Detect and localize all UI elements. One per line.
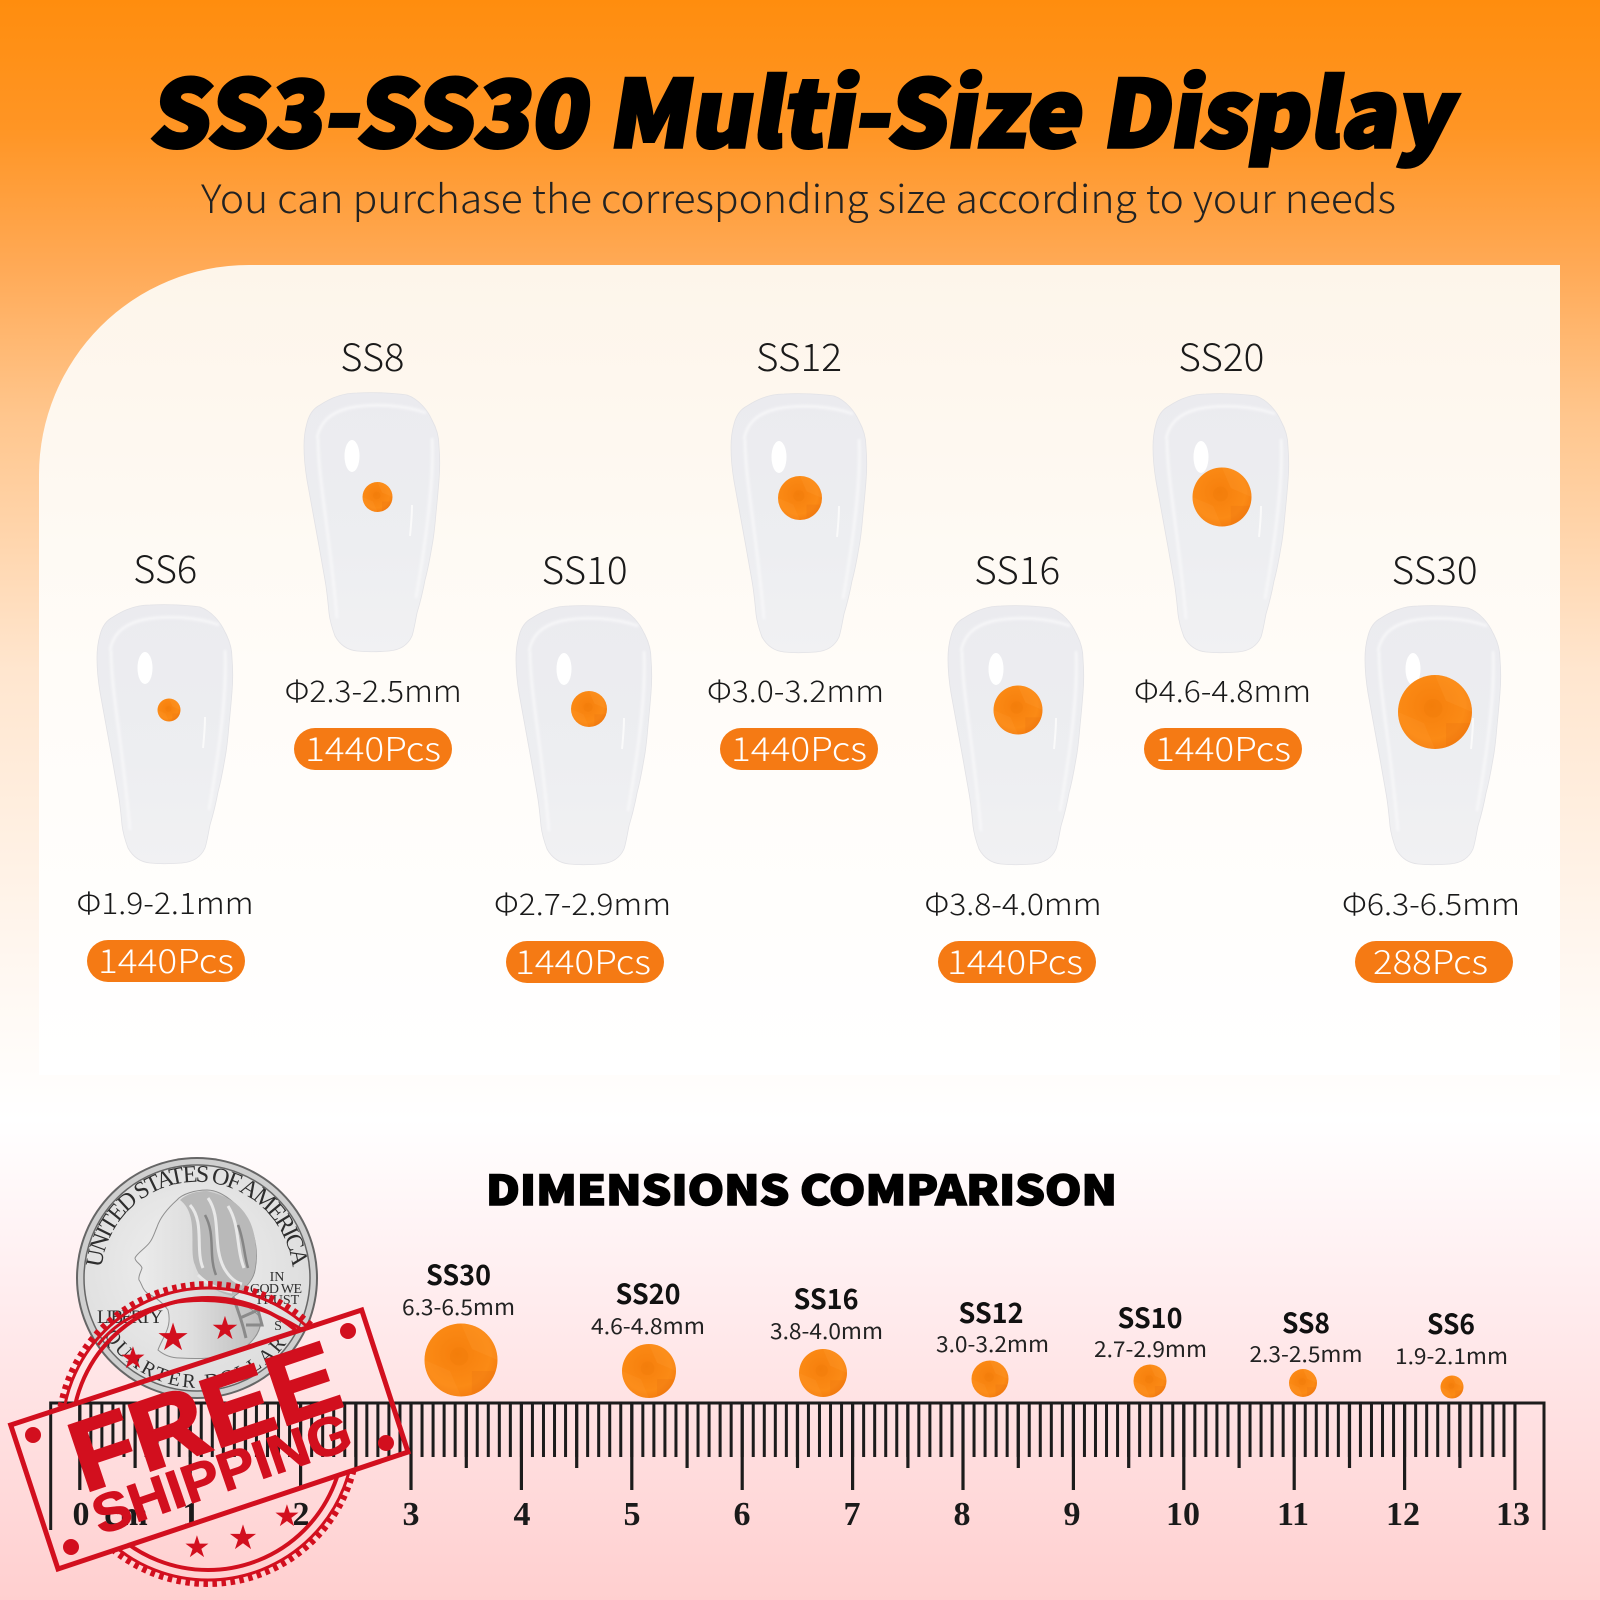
gem SS12 [778,476,822,520]
comparison SS20 [591,1273,705,1398]
coin legend: UNITED STATES OF AMERICA [86,1166,307,1268]
ruler numbers: 6 [734,1496,750,1533]
ruler numbers: 7 [844,1496,860,1533]
stamp text FREE: FREE [55,1320,354,1514]
diameter SS6: Φ1.9-2.1mm [76,879,254,923]
ruler numbers: 8 [954,1496,970,1533]
label SS12: SS12 [756,327,842,382]
nail SS20 [1153,394,1289,653]
title: SS3-SS30 Multi-Size Display [144,41,1469,174]
ruler numbers: 0 [72,1496,90,1533]
coin motto: GOD WE [250,1282,302,1297]
coin motto [250,1270,302,1334]
diameter SS8: Φ2.3-2.5mm [285,667,462,711]
subtitle: You can purchase the corresponding size according to your needs [201,169,1396,225]
free shipping stamp [11,1285,408,1583]
diameter SS10: Φ2.7-2.9mm [494,880,671,924]
stamp stars: ★ [156,1315,190,1359]
diameter SS30: Φ6.3-6.5mm [1342,880,1520,924]
comparison SS20: SS20 [616,1273,680,1313]
gem SS30 [1398,675,1472,749]
stamp stars: ★ [274,1499,300,1534]
comparison SS12 [936,1292,1049,1398]
gem SS16 [994,686,1042,734]
heading: dimensions comparison: DIMENSIONS COMPARISON [486,1157,1117,1217]
ruler numbers: 9 [1064,1496,1080,1533]
stamp stars: ★ [184,1530,210,1565]
comparison SS16: SS16 [794,1278,858,1318]
ruler numbers: 1 [182,1496,200,1533]
comparison SS10: SS10 [1118,1297,1182,1337]
gem SS10 [571,691,607,727]
coin motto: IN [270,1270,284,1285]
nail SS8 [304,393,440,652]
comparison SS30: 6.3-6.5mm [402,1290,515,1322]
size column: SS20 [1134,327,1311,771]
count pill SS12: 1440Pcs [731,723,867,771]
coin quarter dollar legend: QUARTER DOLLAR [106,1330,286,1388]
count pill SS30 [1355,936,1513,984]
nail SS16 [948,606,1084,865]
comparison SS12: 3.0-3.2mm [936,1327,1049,1359]
comparison SS10 [1094,1297,1207,1398]
label SS20: SS20 [1178,327,1264,382]
comparison SS6: 1.9-2.1mm [1395,1339,1508,1371]
stamp text SHIPPING: SHIPPING [84,1402,359,1546]
size column: SS8 [285,327,462,771]
ruler numbers: 5 [624,1496,640,1533]
ruler numbers [72,1496,1530,1533]
stamp seal ring [59,1285,357,1583]
count pill SS6: 1440Pcs [98,935,234,983]
label SS16: SS16 [974,540,1060,595]
comparison SS8: SS8 [1282,1302,1330,1342]
comparison SS30: SS30 [426,1254,491,1294]
size column: SS16 [924,540,1102,984]
nail SS6 [97,605,233,864]
size column: SS30 [1342,540,1520,984]
ruler numbers: 11 [1277,1496,1309,1533]
ruler numbers: 10 [1166,1496,1200,1533]
stamp stars [120,1309,300,1565]
count pill SS8: 1440Pcs [305,723,441,771]
panel: nail display [39,265,1560,1075]
ruler numbers: 12 [1386,1496,1420,1533]
comparison SS8 [1250,1302,1362,1397]
stamp rivets [25,1323,394,1555]
count pill SS16: 1440Pcs [947,936,1083,984]
gem SS6 [158,698,180,722]
gem SS8 [362,482,392,512]
gem SS20 [1192,468,1252,526]
coin motto: TRUST [255,1293,300,1308]
ruler numbers: 13 [1496,1496,1530,1533]
size column: SS6 [76,539,254,983]
comparison SS12: SS12 [958,1292,1024,1332]
count pill SS10: 1440Pcs [515,936,651,984]
stamp stars: ★ [120,1341,146,1376]
ruler numbers: 2 [292,1496,310,1533]
comparison SS30 [402,1254,515,1396]
diameter SS12: Φ3.0-3.2mm [707,667,884,711]
ruler [51,1403,1544,1533]
ruler numbers: 4 [514,1496,530,1533]
quarter coin [76,1157,318,1399]
ruler numbers: 3 [402,1496,420,1533]
label SS8: SS8 [340,327,404,382]
nail SS30 [1365,606,1501,865]
ruler numbers: cm [104,1496,148,1533]
comparison SS10: 2.7-2.9mm [1094,1332,1207,1364]
stamp stars: ★ [211,1309,239,1347]
stamp rectangle [11,1310,408,1569]
comparison SS16: 3.8-4.0mm [770,1314,883,1346]
stamp stars: ★ [228,1518,258,1558]
comparison SS6: SS6 [1427,1303,1475,1343]
diameter SS20: Φ4.6-4.8mm [1134,667,1311,711]
label SS10: SS10 [542,540,628,595]
nail SS10 [516,606,652,865]
comparison SS20: 4.6-4.8mm [591,1309,705,1341]
coin motto: S [274,1319,282,1334]
count pill SS20: 1440Pcs [1155,723,1291,771]
size column: SS12 [707,327,884,771]
label SS30: SS30 [1392,540,1478,595]
comparison SS6 [1395,1303,1508,1398]
diameter SS16: Φ3.8-4.0mm [924,880,1102,924]
count pill SS30: 288Pcs [1373,936,1488,984]
gem comparison row [402,1254,1508,1398]
size column: SS10 [494,540,671,984]
coin liberty: LIBERTY [97,1307,163,1328]
nail SS12 [731,394,867,653]
coin portrait [135,1190,262,1359]
comparison SS16 [770,1278,883,1397]
comparison SS8: 2.3-2.5mm [1250,1337,1362,1369]
label SS6: SS6 [133,539,197,594]
